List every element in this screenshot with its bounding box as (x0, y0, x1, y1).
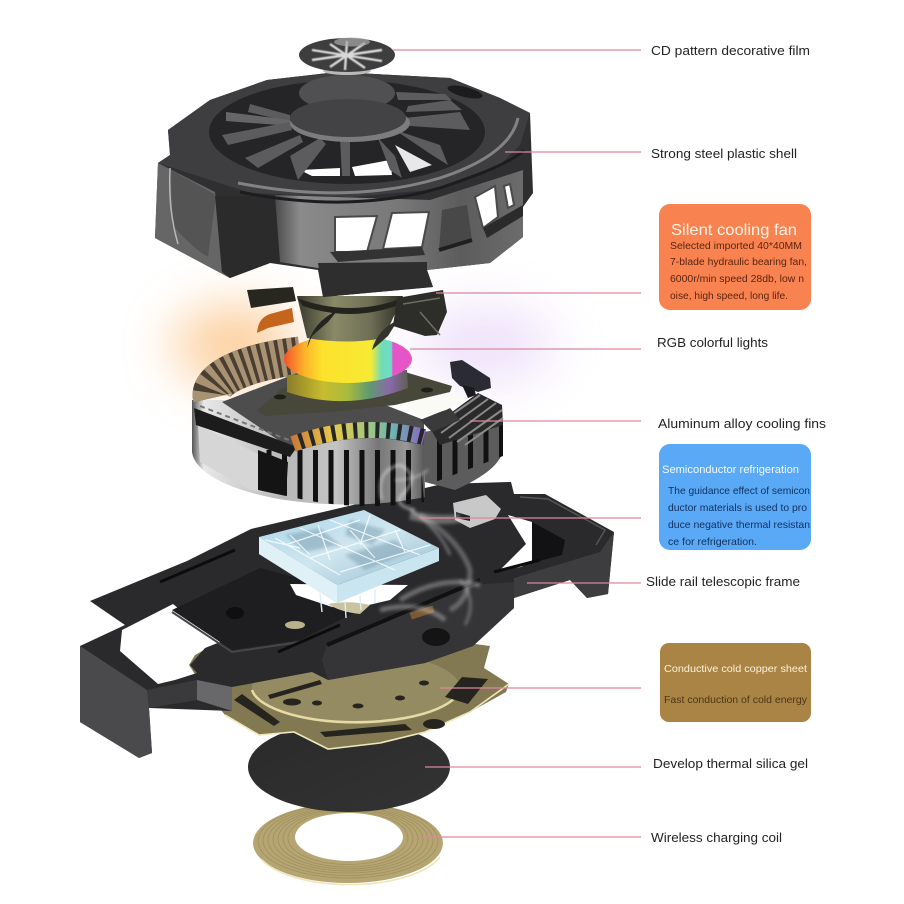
callout: conductive cold copper sheet: Fast conduction of cold energy (664, 694, 808, 706)
callout: silent cooling fan: 6000r/min speed 28db, low n (670, 274, 804, 285)
right blades (393, 290, 447, 336)
upper hub (299, 75, 395, 111)
label: strong steel plastic shell: Strong steel plastic shell (651, 146, 797, 161)
callout: silent cooling fan: 7-blade hydraulic bearing fan, (670, 257, 807, 268)
orange blade (257, 308, 294, 333)
callout: semiconductor refrigeration: The guidance effect of semicon (668, 485, 810, 497)
thermal silica gel (248, 722, 450, 812)
top surface (158, 72, 530, 197)
callout: semiconductor refrigeration: ce for refrigeration. (668, 536, 757, 548)
corner face (215, 196, 280, 278)
front right blade (372, 320, 398, 350)
rainbow fins (293, 430, 424, 444)
rim highlight (238, 118, 518, 193)
spokes (222, 92, 470, 180)
callout: silent cooling fan (659, 204, 811, 310)
central tray (172, 568, 380, 650)
rail slots (160, 550, 540, 652)
power hole (446, 83, 484, 101)
label: aluminum alloy cooling fins: Aluminum alloy cooling fins (658, 416, 827, 431)
orange light glow (173, 307, 297, 383)
label: develop thermal silica gel: Develop thermal silica gel (653, 756, 808, 771)
callout: semiconductor refrigeration: duce negative thermal resistan (668, 519, 810, 531)
callout: silent cooling fan: Silent cooling fan (671, 222, 797, 239)
purple light glow (415, 309, 555, 381)
front-left dark fins (194, 408, 297, 457)
silent cooling fan (247, 287, 447, 350)
label: slide rail telescopic frame: Slide rail telescopic frame (646, 574, 800, 589)
copper slots and holes (234, 677, 488, 737)
white opening under the ice (290, 584, 408, 608)
left clip face (80, 646, 152, 758)
wireless charging coil (253, 803, 443, 885)
front lower dark (318, 262, 433, 297)
leader lines (393, 50, 641, 837)
rgb colorful lights (257, 335, 452, 416)
semiconductor ice block (259, 510, 439, 618)
fin body (192, 400, 425, 505)
callout: conductive cold copper sheet: Conductive cold copper sheet (664, 663, 807, 675)
shell silhouette (155, 72, 533, 297)
lit ellipse (284, 335, 412, 383)
label: wireless charging coil: Wireless charging coil (651, 830, 782, 845)
top fins back (212, 356, 300, 398)
strong steel plastic shell (155, 72, 533, 297)
right clip face (514, 532, 614, 598)
recess gaps (300, 145, 432, 176)
hub (297, 296, 403, 342)
left blade (247, 287, 296, 308)
aluminum alloy cooling fins (192, 356, 503, 506)
left face (155, 163, 230, 278)
callout: silent cooling fan: Selected imported 40*40MM (670, 241, 802, 252)
small copper spring (410, 605, 435, 620)
colored band (287, 370, 408, 401)
lower hub (290, 104, 410, 142)
callout: semiconductor refrigeration: Semiconductor refrigeration (662, 464, 799, 476)
three arm stand (257, 372, 452, 416)
white gap (405, 395, 470, 418)
connector plug (450, 360, 491, 398)
callout: conductive cold copper sheet (660, 643, 811, 722)
ice blotches (285, 520, 410, 570)
recess (209, 80, 485, 184)
cd pattern decorative film (299, 38, 395, 75)
callout: semiconductor refrigeration (659, 444, 811, 550)
label: rgb colorful lights: RGB colorful lights (657, 335, 769, 350)
usb-c connector (453, 495, 501, 528)
callout: silent cooling fan: oise, high speed, long life. (670, 291, 788, 302)
slide rail telescopic frame (80, 482, 614, 758)
cold smoke (380, 465, 480, 625)
front face (275, 170, 523, 270)
inner disc (222, 372, 424, 448)
conductive copper sheet (189, 620, 509, 749)
right top fins (430, 393, 503, 445)
label: cd pattern decorative film: CD pattern decorative film (651, 43, 810, 58)
right fin body (423, 420, 503, 490)
windows (335, 184, 514, 252)
copper disc (252, 652, 460, 724)
posts (226, 607, 244, 619)
recessed panel (439, 205, 472, 250)
front blade (307, 310, 338, 348)
callout: semiconductor refrigeration: ductor materials is used to pro (668, 502, 807, 514)
